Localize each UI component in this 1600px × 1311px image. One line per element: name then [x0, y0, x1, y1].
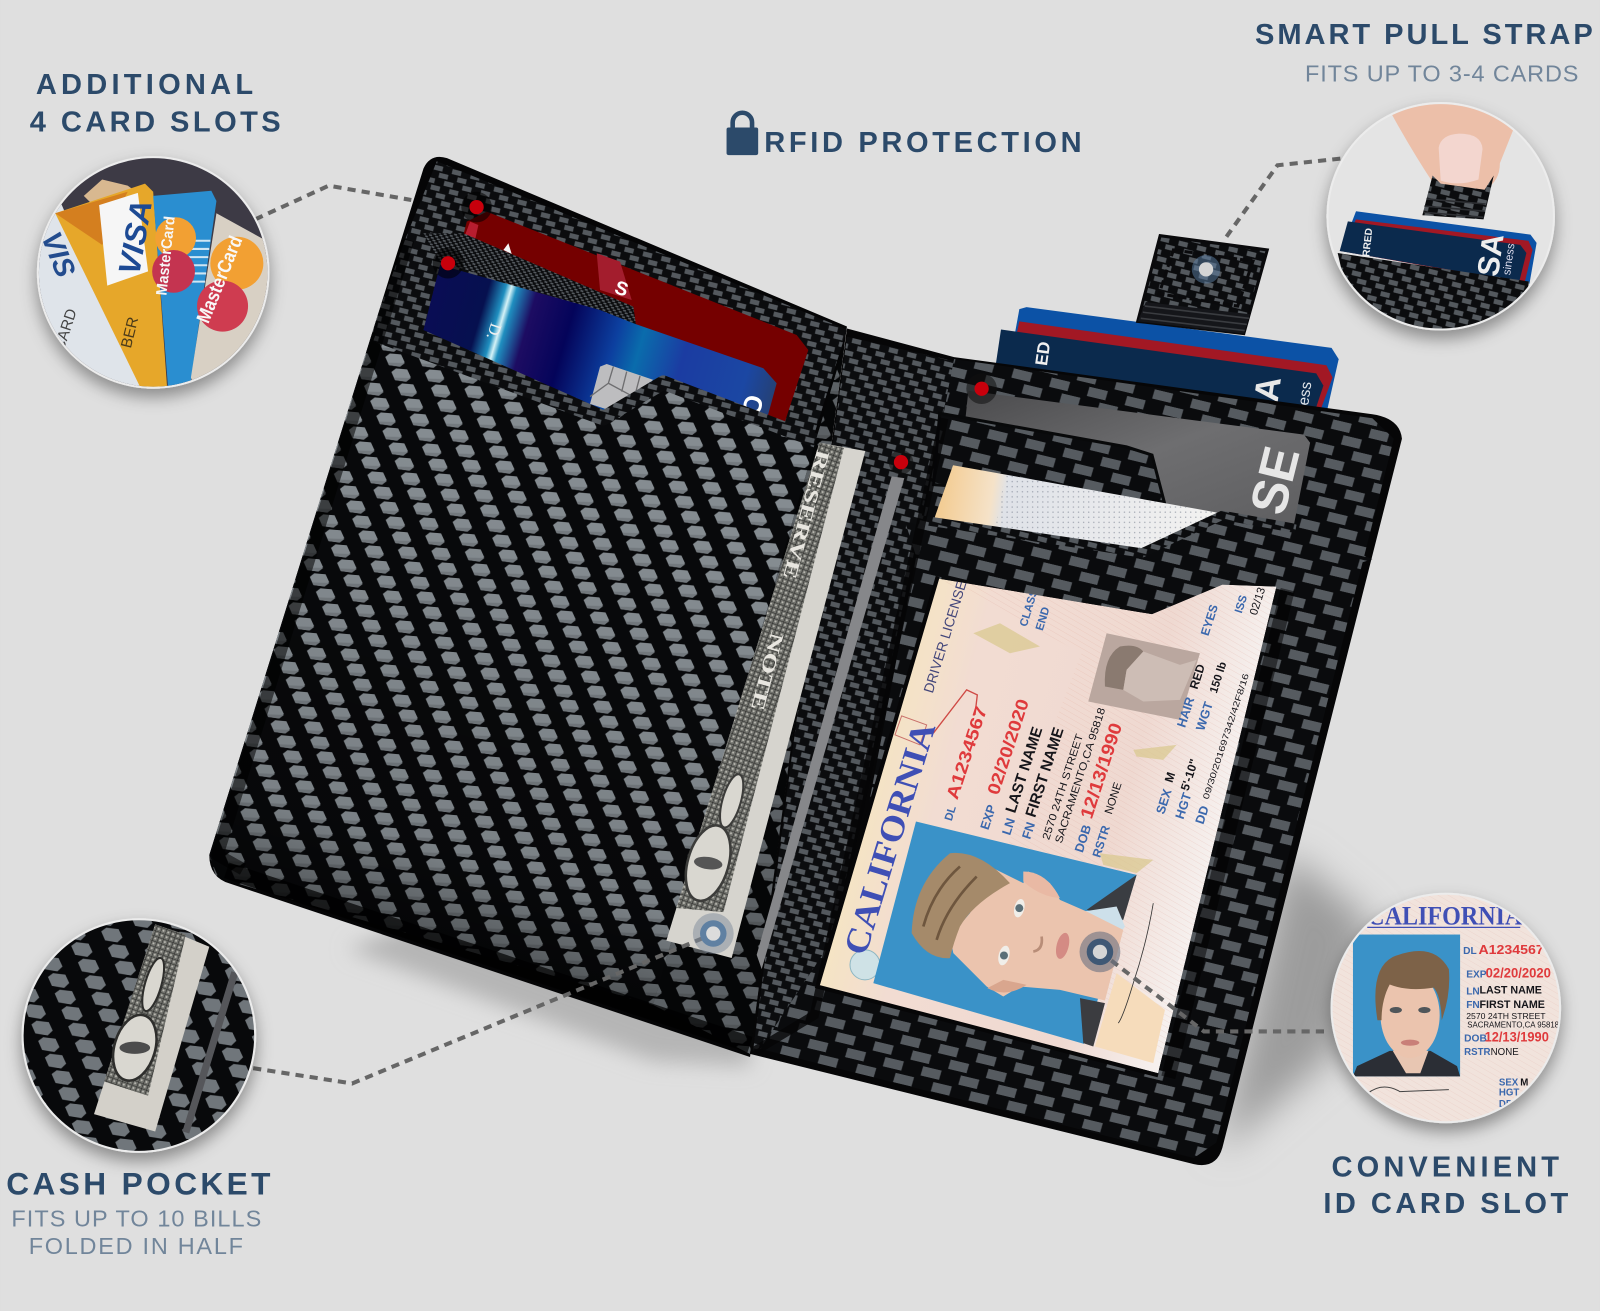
connector: pull strap [1226, 158, 1345, 237]
cash slot [757, 476, 904, 969]
card text [837, 579, 1268, 959]
circle: pull strap: SA [1471, 232, 1511, 278]
circle: id card [1326, 893, 1566, 1127]
card text: 09/30/201697342/42F8/16 [1201, 672, 1251, 800]
front pocket with carbon weave [209, 240, 847, 1054]
card text: LAST NAME [1003, 725, 1046, 815]
bottom edge band [227, 870, 750, 1045]
finger [1392, 102, 1514, 190]
upper pocket flap [934, 413, 1164, 502]
strip right of bill [653, 337, 847, 1054]
red card [463, 212, 808, 427]
card text: 02/20/2020 [983, 696, 1033, 797]
card text: EYES [1198, 603, 1221, 637]
face [912, 853, 1123, 1000]
id details: HGT [1499, 1088, 1519, 1099]
connector: card slots [255, 186, 411, 219]
connector: id card slot [1100, 952, 1330, 1031]
card text: M [1162, 770, 1178, 784]
card text: DD [1193, 804, 1212, 826]
banknote paper in pocket [934, 465, 1226, 554]
spine [753, 337, 954, 1051]
card text: 02/13 [1248, 586, 1268, 617]
id details [1463, 942, 1559, 1110]
circle: pull strap [1326, 102, 1556, 337]
id portrait [1353, 935, 1460, 1076]
id details: A1234567 [1478, 942, 1544, 957]
right panel weave [760, 359, 1394, 1158]
circle: credit cards: BER [118, 315, 142, 350]
id details: LN [1466, 987, 1480, 998]
connector: cash pocket [253, 936, 709, 1083]
id details: RSTR [1464, 1047, 1491, 1058]
heading: additional 4 card slots [30, 69, 281, 139]
seal [850, 950, 880, 980]
jacket and shirt [1080, 875, 1137, 1046]
circle: cash pocket [21, 918, 260, 1158]
circle: credit cards: CARD [51, 307, 81, 353]
id details: FIRST NAME [1479, 999, 1545, 1011]
card text: 5'-10" [1178, 757, 1201, 792]
id details: DOB [1464, 1034, 1487, 1045]
white card [39, 204, 140, 386]
wallet left panel [209, 157, 847, 1057]
yellow visa card [55, 184, 167, 393]
card text: DOB [1072, 823, 1094, 854]
slot edge dark [755, 418, 944, 1051]
blue mastercard [153, 191, 216, 393]
smart pull strap [1138, 236, 1267, 334]
circle: credit cards [31, 153, 276, 398]
hotspot: id card [1080, 931, 1120, 972]
heading: convenient id card slot: ID CARD SLOT [1323, 1188, 1568, 1220]
heading: convenient id card slot: CONVENIENT [1332, 1151, 1559, 1183]
card text: RED [1187, 662, 1208, 691]
heading: convenient id card slot [1323, 1151, 1568, 1220]
strap [1422, 175, 1494, 219]
icon: lock [727, 113, 758, 155]
id details: 02/20/2020 [1486, 965, 1551, 981]
cards behind right panel: ess [1295, 380, 1315, 407]
card text: LN [1000, 816, 1018, 837]
card text: RSTR [1089, 823, 1113, 859]
folded banknote: NOTE [746, 630, 787, 713]
circle: pull strap: siness [1501, 242, 1518, 276]
slot divider strip: C [736, 392, 770, 418]
card text: DL [943, 804, 959, 822]
blue card [423, 265, 777, 420]
card text: FN [1020, 820, 1038, 841]
circle: credit cards: VIS [34, 227, 81, 282]
id details: DD [1499, 1099, 1513, 1110]
wallet cast shadow [347, 852, 1372, 1153]
heading: cash pocket: CASH POCKET [6, 1166, 270, 1202]
pocket stitched edge [376, 335, 816, 441]
hotspot: pull strap [1192, 255, 1220, 284]
circle: credit cards: VISA [112, 197, 159, 278]
card text: WGT [1193, 700, 1216, 732]
id details: 12/13/1990 [1485, 1030, 1549, 1046]
circle: credit cards: MasterCard [193, 233, 247, 326]
top card-slot backing [372, 161, 847, 444]
circle: id card: CALIFORNIA [1367, 900, 1522, 930]
id details: NONE [1491, 1047, 1519, 1058]
small ghost photo [1088, 633, 1200, 720]
lower pocket [903, 513, 1372, 617]
id right edge shadow [1168, 590, 1288, 1077]
heading: cash pocket: FITS UP TO 10 BILLS [11, 1205, 261, 1231]
wallet right panel and spine [750, 329, 1402, 1165]
chip [590, 364, 653, 410]
heading: additional 4 card slots: 4 CARD SLOTS [30, 107, 281, 139]
id card window edge [817, 576, 1158, 1075]
California driver license [817, 578, 1276, 1073]
pocket [1338, 253, 1529, 337]
card text: 2570 24TH STREET [1040, 732, 1086, 841]
red card: S [612, 277, 631, 302]
heading: additional 4 card slots: ADDITIONAL [36, 69, 253, 101]
signature area [1095, 903, 1165, 1063]
hotspot: cash pocket [693, 913, 734, 954]
card text: CLASS [1018, 587, 1041, 628]
id details: DL [1463, 946, 1477, 957]
cards behind right panel: ED [1031, 340, 1054, 367]
slot divider strip: D. [483, 321, 506, 342]
card text: ISS [1233, 593, 1250, 615]
card text: 12/13/1990 [1076, 720, 1126, 821]
id details: FN [1466, 1000, 1480, 1011]
heading: smart pull strap: FITS UP TO 3-4 CARDS [1305, 61, 1578, 87]
folded banknote [666, 443, 865, 958]
metal card: SE [1239, 441, 1311, 520]
heading: cash pocket [6, 1166, 270, 1259]
cards [1341, 211, 1537, 284]
card text: A1234567 [942, 704, 991, 802]
card text: EXP [978, 803, 999, 831]
id details: LAST NAME [1479, 985, 1542, 997]
card text: HAIR [1174, 695, 1197, 729]
heading: smart pull strap: SMART PULL STRAP [1255, 19, 1593, 51]
cards behind right panel: A [1248, 374, 1289, 404]
heading: rfid protection: RFID PROTECTION [764, 127, 1082, 159]
id details: EXP [1466, 969, 1487, 980]
cards behind right panel [994, 307, 1339, 413]
id details: SACRAMENTO,CA 95818 [1467, 1019, 1559, 1029]
slot divider strip [423, 233, 777, 420]
red markers [433, 192, 997, 474]
card text: END [1034, 606, 1052, 632]
circle: credit cards: MasterCard [154, 215, 179, 296]
outer left edge band [217, 240, 408, 869]
card text: HGT [1173, 791, 1194, 821]
metal card [959, 391, 1311, 525]
card text: FIRST NAME [1023, 725, 1068, 819]
card text: SACRAMENTO,CA 95818 [1053, 706, 1108, 845]
decorative tree marks [973, 623, 1177, 873]
beige mastercard [190, 213, 268, 380]
card text: SEX [1153, 787, 1175, 816]
card text: DRIVER LICENSE [920, 579, 970, 695]
circle: pull strap: RRED [1361, 228, 1375, 257]
card text: NONE [1103, 781, 1125, 816]
id details: SEX [1499, 1078, 1519, 1089]
card text: 150 lb [1208, 660, 1229, 695]
id details: M [1520, 1078, 1528, 1089]
heading: cash pocket: FOLDED IN HALF [29, 1233, 243, 1259]
folded banknote: RESERVE [778, 448, 833, 581]
portrait background [873, 822, 1137, 1044]
heading: smart pull strap [1255, 19, 1593, 87]
card text: CALIFORNIA [837, 718, 943, 959]
id details: 2570 24TH STREET [1466, 1011, 1546, 1021]
